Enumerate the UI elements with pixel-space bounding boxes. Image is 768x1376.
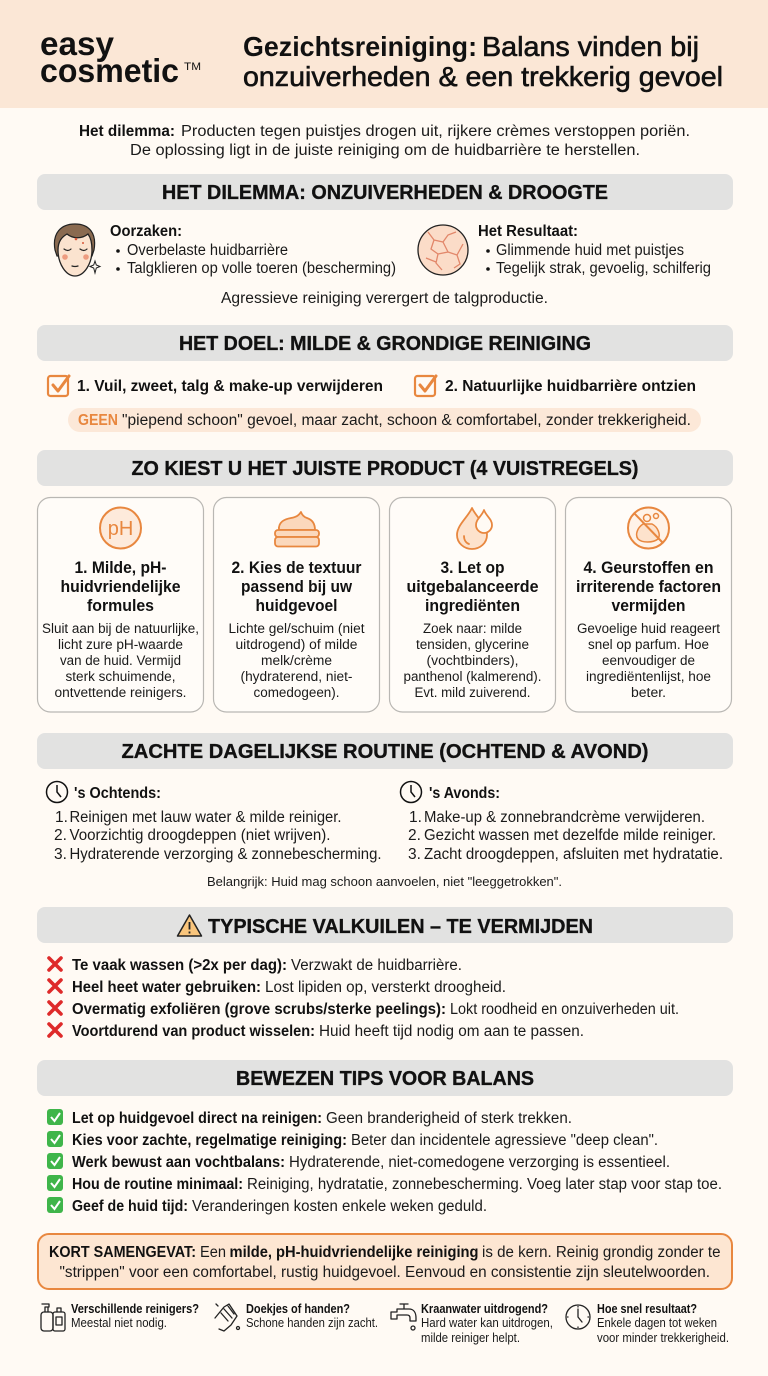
text: result	[478, 223, 711, 277]
logo: easy	[40, 25, 115, 62]
header band	[0, 0, 768, 108]
intro text: De oplossing ligt in de juiste reiniging om de huidbarrière te herstellen.	[130, 142, 640, 159]
evening routine: Zacht droogdeppen, afsluiten met hydratatie.	[424, 846, 723, 863]
evening routine: 3.	[408, 846, 421, 863]
pitfall 1	[49, 957, 462, 974]
FAQ: how fast: voor minder trekkerigheid.	[597, 1331, 729, 1345]
icon: cream jar	[275, 512, 319, 546]
intro text	[79, 123, 690, 159]
icon: clock	[400, 782, 422, 802]
card 2: texture: Lichte gel/schuim (niet	[228, 621, 365, 637]
card 3: ingredients: panthenol (kalmerend).	[404, 669, 542, 685]
morning routine: 3.	[54, 846, 67, 863]
card 4: fragrance: 4. Geurstoffen en	[584, 558, 714, 577]
heading: pitfalls	[37, 907, 733, 943]
note: aggressive cleansing: Agressieve reiniging verergert de talgproductie.	[221, 290, 548, 307]
card 1: pH	[38, 498, 204, 712]
heading: rules: ZO KIEST U HET JUISTE PRODUCT (4 VUISTREGELS)	[132, 458, 638, 480]
tip 5	[47, 1197, 487, 1215]
card 2: texture: passend bij uw	[241, 577, 353, 596]
card 4: fragrance: vermijden	[612, 596, 686, 615]
text: causes	[110, 223, 396, 277]
callout: summary: KORT SAMENGEVAT:	[49, 1244, 196, 1261]
goal item 2: 2. Natuurlijke huidbarrière ontzien	[445, 378, 696, 395]
pitfall 3: Lokt roodheid en onzuiverheden uit.	[450, 1001, 679, 1018]
morning routine: Reinigen met lauw water & milde reiniger.	[70, 809, 342, 826]
tip 1: Let op huidgevoel direct na reinigen:	[72, 1110, 322, 1127]
tip 2: Kies voor zachte, regelmatige reiniging:	[72, 1132, 347, 1149]
heading: tips	[37, 1060, 733, 1096]
morning routine: 2.	[54, 827, 67, 844]
pitfall 4: Huid heeft tijd nodig om aan te passen.	[319, 1023, 584, 1040]
tip 1	[47, 1109, 572, 1127]
icon: no fragrance	[628, 508, 669, 548]
card 2: texture: melk/crème	[261, 653, 332, 669]
card 3: ingredients: tensiden, glycerine	[416, 637, 529, 653]
heading: dilemma	[37, 174, 733, 210]
card 3: ingredients: Zoek naar: milde	[423, 621, 522, 637]
card 1: pH: sterk schuimende,	[66, 669, 176, 685]
FAQ: how fast: Hoe snel resultaat?	[597, 1302, 697, 1316]
card 4: fragrance: eenvoudiger de	[602, 653, 695, 669]
card 4: fragrance: ingrediëntenlijst, hoe	[586, 669, 711, 685]
panel: goal	[37, 325, 733, 432]
FAQ: wipes or hands: Schone handen zijn zacht.	[246, 1316, 378, 1330]
icon: cracked skin	[418, 225, 468, 275]
pitfall 2	[49, 979, 506, 996]
text: causes: Overbelaste huidbarrière	[127, 242, 288, 259]
evening routine: Gezicht wassen met dezelfde milde reiniger.	[424, 827, 716, 844]
heading: pitfalls: TYPISCHE VALKUILEN – TE VERMIJDEN	[208, 916, 593, 938]
FAQ: tap water	[391, 1302, 553, 1345]
pitfall 1: Te vaak wassen (>2x per dag):	[72, 957, 287, 974]
icon: tap	[391, 1304, 416, 1330]
heading: tips: BEWEZEN TIPS VOOR BALANS	[236, 1068, 534, 1090]
pitfall 2: Heel heet water gebruiken:	[72, 979, 261, 996]
FAQ: tap water: milde reiniger helpt.	[421, 1331, 520, 1345]
pitfall 1: Verzwakt de huidbarrière.	[291, 957, 462, 974]
intro text: Producten tegen puistjes drogen uit, rijkere crèmes verstoppen poriën.	[181, 123, 690, 140]
pitfall 3	[49, 1001, 679, 1018]
text: result: Tegelijk strak, gevoelig, schilferig	[496, 260, 711, 277]
FAQ: cleansers: Verschillende reinigers?	[71, 1302, 199, 1316]
panel: tips	[37, 1060, 733, 1215]
heading: goal	[37, 325, 733, 361]
morning routine: 1.	[55, 809, 68, 826]
tip 4	[47, 1175, 722, 1193]
heading: goal: HET DOEL: MILDE & GRONDIGE REINIGING	[179, 333, 591, 355]
icon: warning	[178, 915, 202, 936]
logo: TM	[184, 61, 201, 73]
icon: face with blemishes	[54, 224, 100, 276]
FAQ: cleansers	[41, 1302, 199, 1331]
card 3: ingredients	[390, 498, 556, 712]
tip 5: Veranderingen kosten enkele weken geduld.	[192, 1198, 487, 1215]
icon: pH: pH	[108, 518, 133, 540]
heading: rules	[37, 450, 733, 486]
icon: clock	[46, 782, 68, 802]
title: onzuiverheden & een trekkerig gevoel	[243, 61, 723, 92]
title: Balans vinden bij	[482, 31, 699, 62]
card 1: pH: Sluit aan bij de natuurlijke,	[42, 621, 199, 637]
FAQ: cleansers: Meestal niet nodig.	[71, 1316, 167, 1330]
card 4: fragrance	[566, 498, 732, 712]
evening routine: 's Avonds:	[429, 785, 500, 802]
icon: pH	[100, 508, 141, 548]
heading: routine	[37, 733, 733, 769]
callout: summary: is de kern. Reinig grondig zonder te	[482, 1244, 720, 1261]
icon: hand	[215, 1304, 240, 1331]
tip 5: Geef de huid tijd:	[72, 1198, 188, 1215]
FAQ: tap water: Hard water kan uitdrogen,	[421, 1316, 553, 1330]
callout: summary: "strippen" voor een comfortabel, rustig huidgevoel. Eenvoud en consistentie zijn sleutelwoorden.	[60, 1264, 710, 1281]
card 1: pH: 1. Milde, pH-	[74, 558, 166, 577]
card 2: texture: 2. Kies de textuur	[232, 558, 362, 577]
tip 2: Beter dan incidentele agressieve "deep clean".	[351, 1132, 658, 1149]
card 4: fragrance: irriterende factoren	[576, 577, 721, 596]
card 3: ingredients: (vochtbinders),	[426, 653, 518, 669]
tip 4: Reiniging, hydratatie, zonnebescherming. Voeg later stap voor stap toe.	[247, 1176, 722, 1193]
text: result: Het Resultaat:	[478, 223, 578, 240]
panel: pitfalls	[37, 907, 733, 1040]
text: causes: Talgklieren op volle toeren (bescherming)	[127, 260, 396, 277]
logo	[40, 25, 201, 89]
icon: clock	[566, 1305, 590, 1329]
morning routine: Voorzichtig droogdeppen (niet wrijven).	[70, 827, 330, 844]
evening routine: 2.	[408, 827, 421, 844]
card 4: fragrance: snel op parfum. Hoe	[588, 637, 709, 653]
card 2: texture: comedogeen).	[254, 685, 340, 701]
FAQ: wipes or hands	[215, 1302, 378, 1331]
heading: routine: ZACHTE DAGELIJKSE ROUTINE (OCHTEND & AVOND)	[122, 741, 648, 763]
callout: summary	[38, 1234, 732, 1289]
card 3: ingredients: uitgebalanceerde	[406, 577, 538, 596]
card 3: ingredients: ingrediënten	[425, 596, 520, 615]
card 1: pH: licht zure pH-waarde	[58, 637, 183, 653]
intro text: Het dilemma:	[79, 123, 175, 140]
card 2: texture	[214, 498, 380, 712]
card 3: ingredients: Evt. mild zuiverend.	[414, 685, 530, 701]
pitfall 4	[49, 1023, 584, 1040]
heading: dilemma: HET DILEMMA: ONZUIVERHEDEN & DROOGTE	[162, 182, 608, 204]
icon: bottles	[41, 1304, 65, 1331]
tip 3	[47, 1153, 670, 1171]
FAQ: how fast	[566, 1302, 729, 1345]
panel: four rules	[37, 450, 733, 712]
pitfall 2: Lost lipiden op, versterkt droogheid.	[265, 979, 506, 996]
card 1: pH: ontvettende reinigers.	[54, 685, 186, 701]
text: result: Glimmende huid met puistjes	[496, 242, 684, 259]
tip 3: Hydraterende, niet-comedogene verzorging is essentieel.	[289, 1154, 670, 1171]
tip 3: Werk bewust aan vochtbalans:	[72, 1154, 285, 1171]
card 2: texture: uitdrogend) of milde	[236, 637, 358, 653]
callout: not squeaky clean: GEEN	[78, 412, 118, 429]
FAQ: wipes or hands: Doekjes of handen?	[246, 1302, 350, 1316]
card 1: pH: formules	[87, 596, 154, 615]
evening routine: Make-up & zonnebrandcrème verwijderen.	[424, 809, 705, 826]
card 2: texture: huidgevoel	[256, 596, 338, 615]
card 1: pH: van de huid. Vermijd	[60, 653, 181, 669]
tip 2	[47, 1131, 658, 1149]
callout: not squeaky clean: "piepend schoon" gevoel, maar zacht, schoon & comfortabel, zonder trekkerigheid.	[122, 412, 691, 429]
FAQ: tap water: Kraanwater uitdrogend?	[421, 1302, 548, 1316]
card 1: pH: huidvriendelijke	[60, 577, 180, 596]
card 4: fragrance: Gevoelige huid reageert	[577, 621, 720, 637]
evening routine	[400, 782, 723, 863]
panel: routine	[37, 733, 733, 889]
pitfall 3: Overmatig exfoliëren (grove scrubs/sterke peelings):	[72, 1001, 446, 1018]
evening routine: 1.	[409, 809, 422, 826]
goal item 1: 1. Vuil, zweet, talg & make-up verwijderen	[77, 378, 383, 395]
pitfall 4: Voortdurend van product wisselen:	[72, 1023, 315, 1040]
logo: cosmetic	[40, 52, 179, 89]
callout: summary: milde, pH-huidvriendelijke reiniging	[230, 1244, 478, 1261]
text: causes: Oorzaken:	[110, 223, 182, 240]
morning routine	[46, 782, 382, 863]
callout: not squeaky clean	[68, 408, 701, 432]
card 3: ingredients: 3. Let op	[440, 558, 504, 577]
panel: dilemma	[37, 174, 733, 307]
title	[243, 31, 723, 92]
card 2: texture: (hydraterend, niet-	[240, 669, 353, 685]
FAQ: how fast: Enkele dagen tot weken	[597, 1316, 717, 1330]
tip 4: Hou de routine minimaal:	[72, 1176, 243, 1193]
note: important: Belangrijk: Huid mag schoon aanvoelen, niet "leeggetrokken".	[207, 874, 562, 889]
tip 1: Geen branderigheid of sterk trekken.	[326, 1110, 572, 1127]
card 4: fragrance: beter.	[631, 685, 666, 701]
morning routine: 's Ochtends:	[74, 785, 161, 802]
morning routine: Hydraterende verzorging & zonnebescherming.	[70, 846, 382, 863]
icon: drops	[457, 508, 492, 549]
title: Gezichtsreiniging:	[243, 31, 477, 62]
callout: summary: Een	[200, 1244, 226, 1261]
